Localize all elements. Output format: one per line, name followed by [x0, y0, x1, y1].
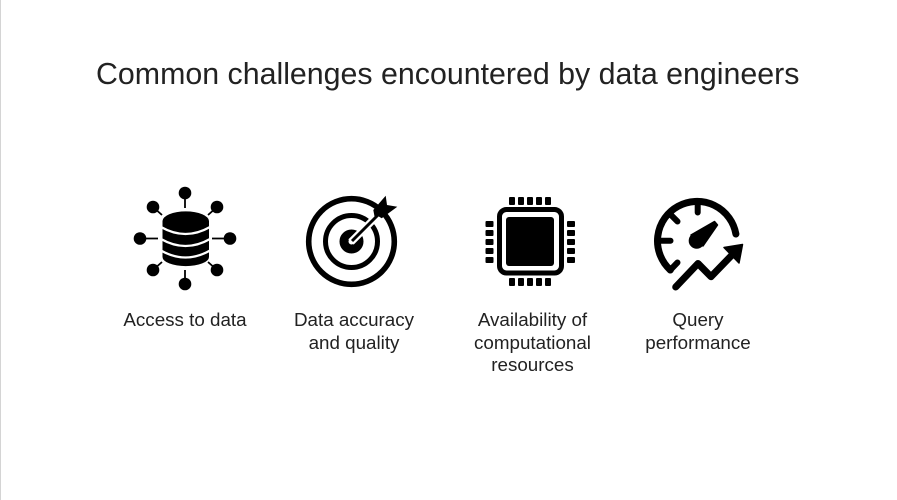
title: Common challenges encountered by data engineers [96, 58, 799, 91]
label: query performance: Query [672, 309, 724, 330]
label: availability of computational resources: computational [474, 332, 591, 352]
label: data accuracy and quality: Data accuracy [294, 309, 414, 330]
label: data accuracy and quality [294, 309, 414, 353]
label: availability of computational resources: Availability of [478, 309, 587, 330]
label: data accuracy and quality: and quality [309, 332, 399, 352]
icon: target with arrow [306, 196, 398, 288]
icon: database with connected nodes [134, 186, 236, 290]
icon: speedometer with rising arrow [654, 198, 744, 290]
label: availability of computational resources: resources [491, 354, 574, 375]
label: query performance [645, 309, 751, 353]
label: availability of computational resources [474, 309, 591, 375]
label: access to data: Access to data [123, 309, 247, 330]
label: query performance: performance [645, 332, 751, 352]
icon: processor chip [486, 197, 575, 286]
